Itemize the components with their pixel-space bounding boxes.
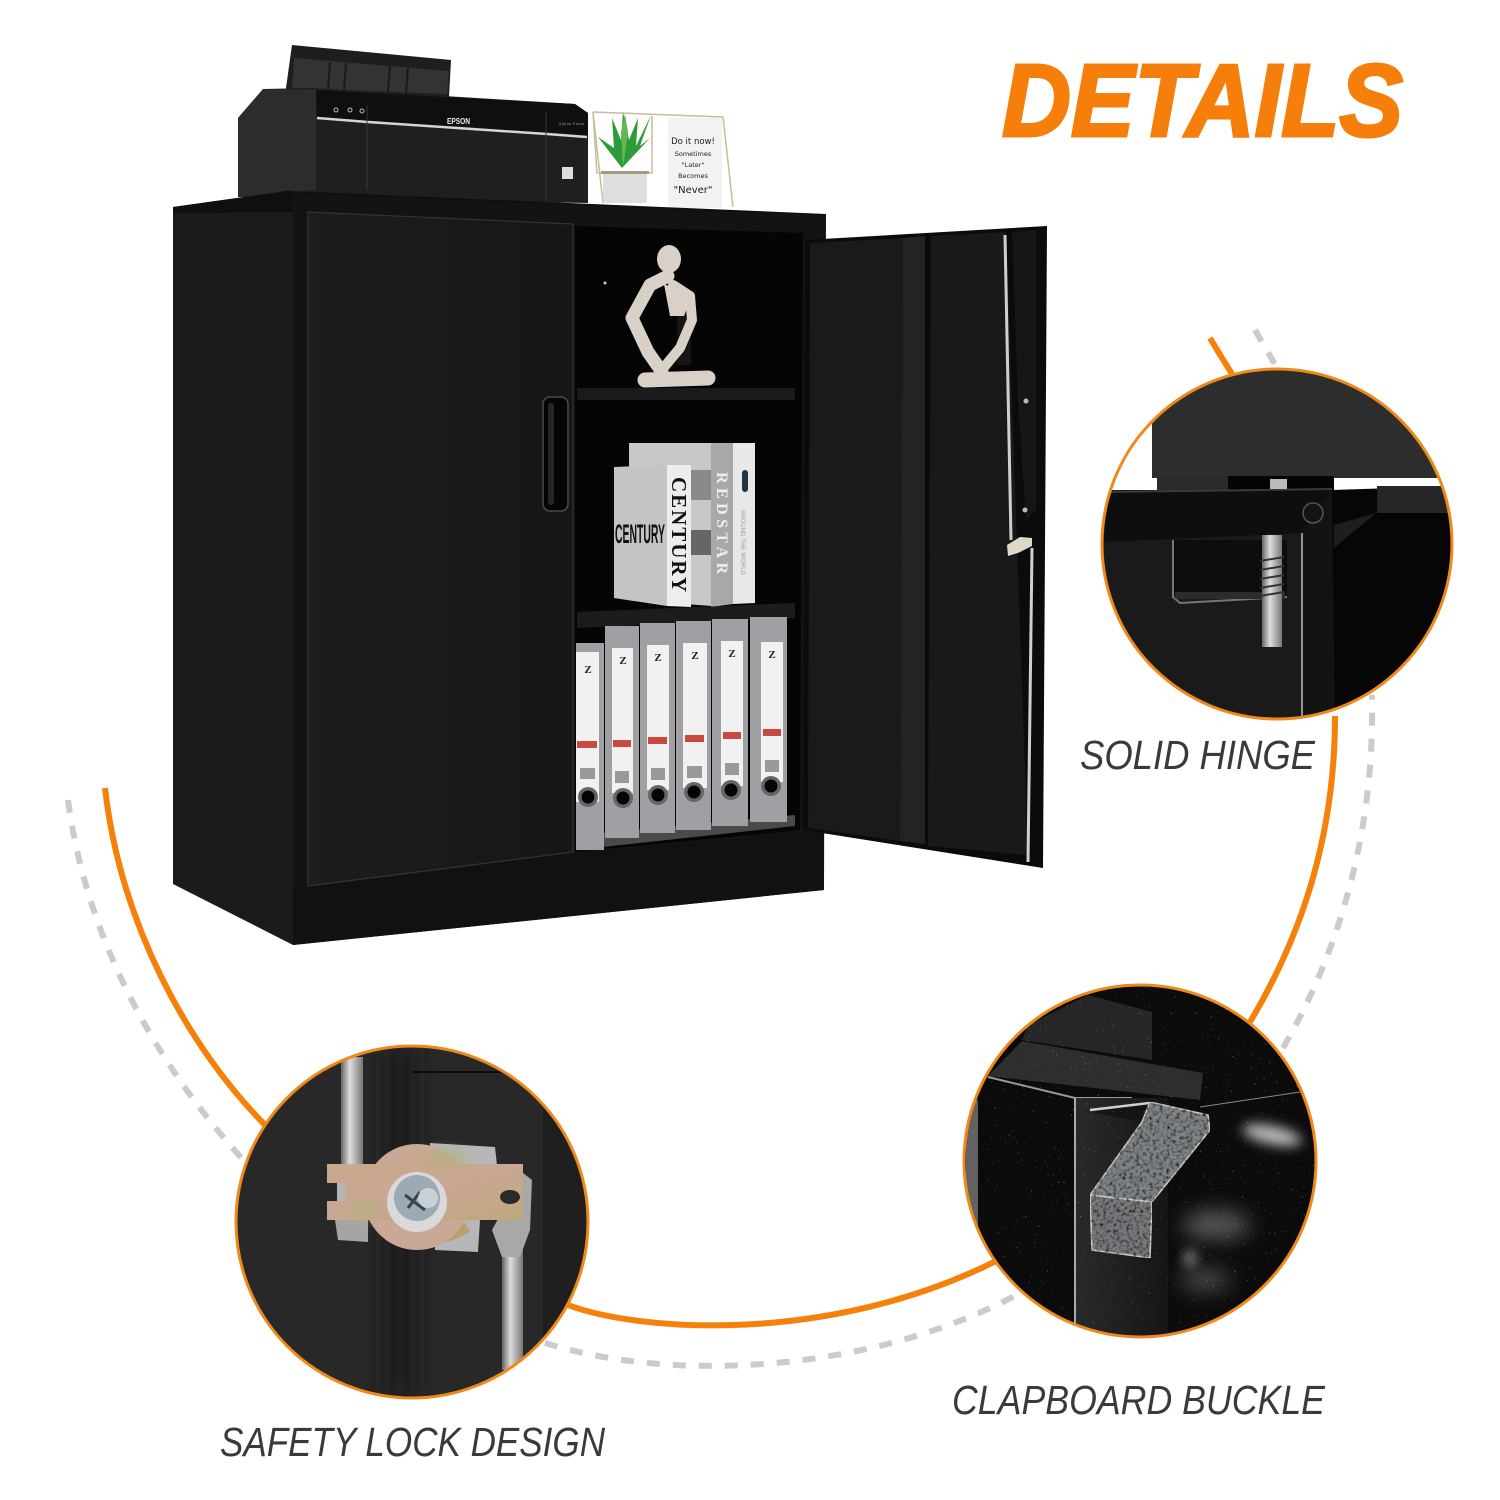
buckle post (1075, 1098, 1168, 1338)
silver clip (1090, 1102, 1210, 1258)
cabinet top (173, 191, 826, 232)
books: REDSTAR (713, 472, 730, 574)
books: CENTURY (615, 519, 665, 549)
binder 5: Z (728, 648, 736, 660)
hinge top bar (1104, 489, 1332, 542)
hinge pin and spring (1260, 479, 1287, 647)
detail circle: clapboard buckle (960, 982, 1320, 1342)
label: clapboard buckle: CLAPBOARD BUCKLE (952, 1377, 1326, 1423)
hinge bracket (1173, 540, 1287, 597)
statue (632, 245, 708, 380)
note card: "Never" (673, 185, 713, 196)
binder 6: Z (768, 649, 776, 661)
note card: Becomes (678, 172, 708, 180)
binder 4 (676, 621, 711, 830)
note card (668, 118, 722, 208)
hinge circle ring (1102, 369, 1452, 719)
note card: Do it now! (671, 137, 715, 147)
books: CENTURY (667, 477, 691, 592)
buckle gray bar (988, 1041, 1203, 1100)
cabinet left side (173, 190, 293, 945)
books (614, 443, 755, 607)
label: solid hinge: SOLID HINGE (1080, 732, 1316, 778)
orange connector arcs (105, 338, 1335, 1325)
cabinet interior (575, 226, 803, 852)
note card: "Later" (682, 161, 704, 169)
binder 3: Z (654, 652, 662, 664)
buckle circle ring (964, 985, 1316, 1337)
lower rod (492, 1173, 532, 1370)
cabinet (173, 190, 826, 945)
binder 1: Z (584, 664, 592, 676)
label: safety lock design: SAFETY LOCK DESIGN (220, 1419, 605, 1465)
shelf upper (577, 388, 795, 400)
hinge post (1331, 489, 1334, 708)
center screw (387, 1172, 447, 1232)
printer body: EPSON (447, 117, 470, 126)
dashed gray guide arcs (68, 330, 1372, 1366)
detail circle: safety lock (232, 1042, 595, 1402)
brass cam plate (327, 1144, 523, 1250)
printer body: Stylus Photo (559, 122, 584, 126)
hex nut (430, 1143, 497, 1252)
door locking rods (1005, 235, 1032, 862)
binder 5 (712, 619, 748, 826)
detail circle: solid hinge (1100, 366, 1457, 722)
glossy highlights (1241, 1120, 1303, 1150)
door handle (543, 397, 568, 511)
books: AROUND THE WORLD (739, 510, 745, 576)
interior floor (576, 815, 795, 850)
shelf lower (577, 603, 795, 628)
note card: Sometimes (675, 150, 712, 158)
binder 1 (576, 643, 604, 850)
cabinet kick plate (293, 832, 824, 945)
binder 4: Z (691, 650, 699, 662)
binders (576, 617, 787, 850)
printer (238, 45, 588, 203)
dark right panel (1332, 488, 1450, 708)
left door (308, 212, 573, 886)
open right door (803, 226, 1047, 868)
plant in pot (593, 112, 733, 207)
printer body (238, 88, 588, 203)
binder 2: Z (619, 655, 627, 667)
upper rod (341, 1057, 363, 1172)
speckle texture (960, 982, 1320, 1342)
binder 3 (640, 623, 675, 833)
lock circle ring (236, 1046, 588, 1398)
printer paper tray (286, 45, 451, 97)
binder 2 (605, 626, 639, 838)
door lock (1007, 537, 1032, 556)
binder 6 (750, 617, 787, 822)
title: DETAILS (1002, 43, 1403, 158)
cabinet front frame (293, 193, 826, 945)
